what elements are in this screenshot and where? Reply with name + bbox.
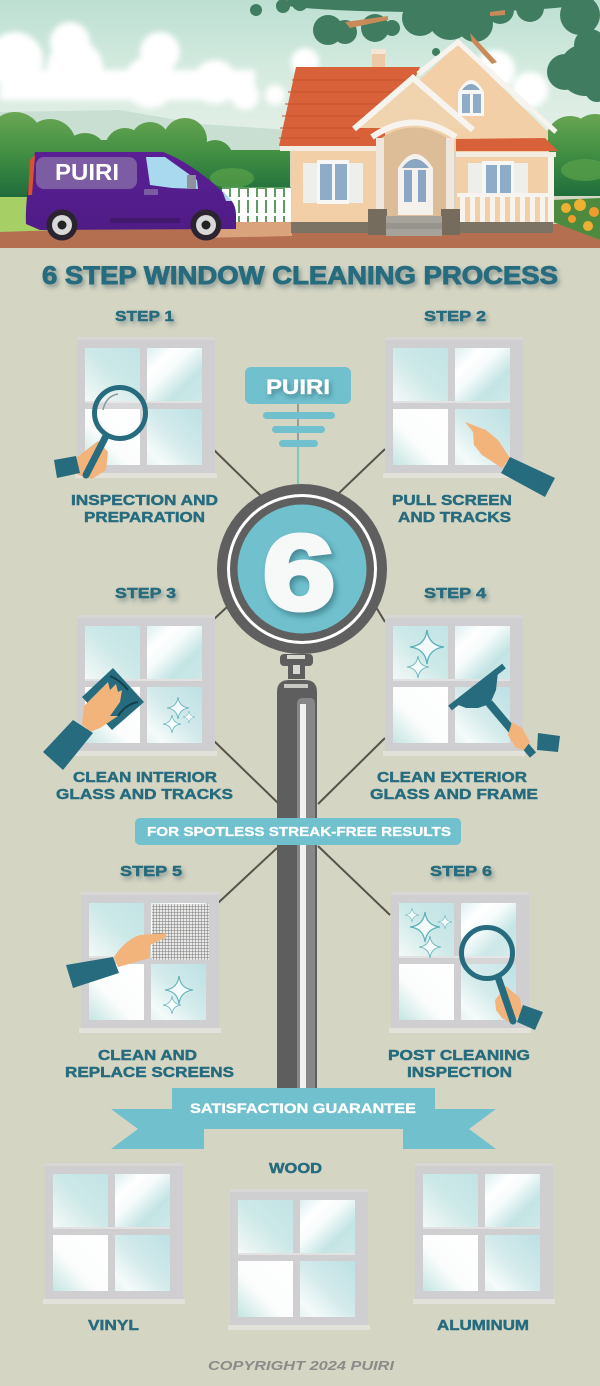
window type: aluminum: ALUMINUM [437, 1318, 529, 1334]
step 1 window [75, 337, 217, 478]
grass [0, 197, 60, 235]
step 4 [370, 586, 560, 803]
ribbon left tail [111, 1109, 204, 1149]
sparkles [405, 908, 452, 958]
sparkles [407, 630, 444, 678]
copyright: COPYRIGHT 2024 PUIRI [208, 1358, 394, 1373]
window type: wood [228, 1161, 370, 1330]
railing [457, 193, 549, 222]
window type: vinyl [43, 1163, 185, 1334]
ribbon text: SATISFACTION GUARANTEE [190, 1101, 416, 1116]
stone pillars [368, 209, 387, 235]
step 2 caption: PULL SCREEN [392, 493, 512, 509]
icon: hand with magnifier [54, 388, 146, 479]
step 4 caption: CLEAN EXTERIOR [377, 770, 528, 786]
step 2 heading: STEP 2 [424, 309, 486, 325]
sign stem lower [297, 447, 299, 486]
van wheel [46, 210, 78, 240]
clouds [0, 22, 548, 110]
step 4 heading: STEP 4 [424, 586, 486, 602]
lighter bush [210, 159, 600, 188]
numeral six: 6 [263, 514, 335, 632]
window type: wood: WOOD [269, 1161, 322, 1177]
roof eave [280, 146, 380, 151]
step 6 caption [388, 1048, 530, 1081]
sky [0, 0, 600, 150]
step 5 [65, 864, 234, 1081]
step 3 caption: CLEAN INTERIOR [73, 770, 218, 786]
ribbon band [172, 1088, 435, 1129]
step 3 [43, 586, 233, 803]
step 5 heading: STEP 5 [120, 864, 182, 880]
guarantee ribbon [111, 1088, 496, 1149]
ribbon right tail [403, 1109, 496, 1149]
step 4 window [383, 615, 525, 756]
step 3 caption: GLASS AND TRACKS [56, 787, 233, 803]
connector lines [213, 449, 390, 915]
screen mesh [152, 904, 209, 960]
left window [303, 160, 363, 204]
tagline banner: FOR SPOTLESS STREAK-FREE RESULTS [147, 824, 451, 839]
sign bars [263, 412, 335, 447]
step 1 caption: PREPARATION [84, 510, 205, 526]
ground [0, 222, 600, 248]
porch [378, 128, 450, 222]
central magnifying glass [217, 484, 387, 1088]
brand sign [245, 367, 351, 486]
icon: hand with squeegee [450, 666, 560, 755]
step 5 caption [65, 1048, 234, 1081]
step 1 caption [71, 493, 218, 526]
main roof [279, 67, 420, 146]
sign stem [297, 404, 299, 447]
stone base [291, 222, 369, 233]
step 6 caption: POST CLEANING [388, 1048, 530, 1064]
lower right roof [456, 138, 558, 151]
van [26, 152, 236, 240]
step 1 caption: INSPECTION AND [71, 493, 218, 509]
attic window [458, 80, 484, 116]
tree branches [345, 10, 505, 64]
right eave [456, 152, 556, 157]
left wall [292, 150, 377, 222]
distant hills [0, 110, 290, 170]
sign plate [245, 367, 351, 404]
lens rings [217, 484, 387, 654]
step 1 heading: STEP 1 [115, 309, 174, 325]
icon: hand with magnifier [462, 928, 543, 1030]
chimney [372, 50, 385, 92]
sign text: PUIRI [266, 376, 330, 399]
icon: pointing hand [465, 422, 555, 497]
step 2 caption: AND TRACKS [398, 510, 511, 526]
step 4 caption: GLASS AND FRAME [370, 787, 538, 803]
icon: pointing hand [66, 933, 167, 988]
tagline banner [135, 818, 461, 845]
right wall [456, 157, 548, 222]
step 5 caption: REPLACE SCREENS [65, 1065, 234, 1081]
window type: aluminum [413, 1163, 555, 1334]
step 2 window [383, 337, 525, 478]
house [279, 42, 558, 236]
step 5 window [79, 892, 221, 1033]
front gable [354, 78, 472, 128]
step 6 heading: STEP 6 [430, 864, 492, 880]
step 2 [383, 309, 555, 526]
upper gable [385, 44, 548, 152]
foliage [250, 0, 600, 102]
sparkles [163, 697, 195, 733]
right window [468, 161, 528, 195]
handle neck [280, 654, 313, 679]
van logo: PUIRI [55, 159, 119, 185]
van wheel [190, 210, 222, 240]
roof tiles [279, 80, 405, 138]
door [398, 154, 433, 215]
step 3 heading: STEP 3 [115, 586, 176, 602]
step 2 caption [392, 493, 512, 526]
step 5 caption: CLEAN AND [98, 1048, 197, 1064]
step 3 caption [56, 770, 233, 803]
step 6 caption: INSPECTION [407, 1065, 512, 1081]
step 3 window [75, 615, 217, 756]
icon: hand with cloth [43, 668, 144, 770]
steps [386, 216, 442, 223]
title: 6 STEP WINDOW CLEANING PROCESS [42, 262, 558, 290]
step 6 window [389, 892, 531, 1033]
step 1 [54, 309, 218, 526]
step 4 caption [370, 770, 538, 803]
header illustration [0, 0, 600, 248]
sparkles [163, 976, 193, 1014]
trees [0, 112, 600, 205]
fence [222, 187, 291, 223]
flowers [553, 198, 600, 240]
window type: vinyl: VINYL [88, 1318, 139, 1334]
handle [277, 680, 317, 1088]
step 6 [388, 864, 543, 1081]
